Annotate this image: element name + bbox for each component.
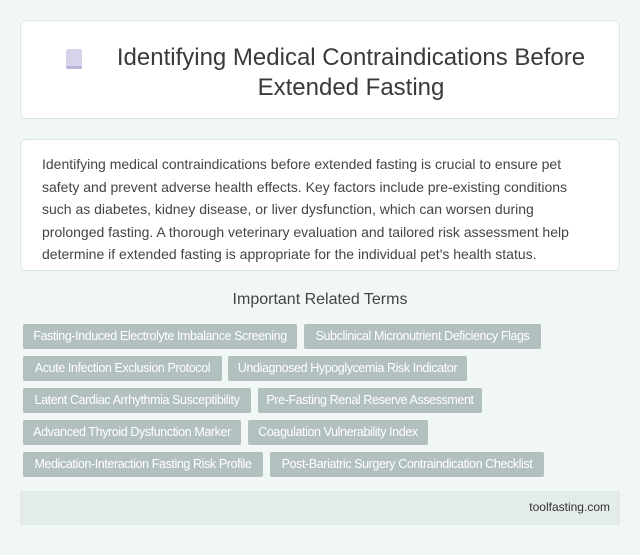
title: Identifying Medical Contraindications Before — [117, 44, 585, 71]
tags: Latent Cardiac Arrhythmia Susceptibility — [35, 393, 239, 407]
tags: Medication-Interaction Fasting Risk Profile — [35, 457, 251, 471]
description text: Identifying medical contraindications before extended fasting is crucial to ensure pet safety and prevent adverse health effects. Key factors include pre-existing conditions such as diabetes, kidney disease, or liver dysfunction, which can worsen during prolonged fasting. A thorough veterinary evaluation and tailored risk assessment help determine if extended fasting is appropriate for the individual pet's health status. — [42, 156, 569, 262]
icon: document — [66, 49, 82, 69]
header card — [20, 20, 620, 119]
tags: Post-Bariatric Surgery Contraindication Checklist — [282, 457, 532, 471]
description card — [20, 139, 620, 271]
tags: Acute Infection Exclusion Protocol — [35, 361, 210, 375]
title: Extended Fasting — [258, 74, 444, 101]
title — [117, 44, 585, 101]
tags: Coagulation Vulnerability Index — [258, 425, 418, 439]
footer — [20, 491, 620, 525]
tags: Pre-Fasting Renal Reserve Assessment — [266, 393, 474, 407]
tags: Fasting-Induced Electrolyte Imbalance Screening — [33, 329, 287, 343]
tags: Undiagnosed Hypoglycemia Risk Indicator — [238, 361, 457, 375]
tags: Subclinical Micronutrient Deficiency Flags — [316, 329, 529, 343]
tags: Advanced Thyroid Dysfunction Marker — [33, 425, 231, 439]
section heading: Important Related Terms — [233, 291, 407, 308]
footer text: toolfasting.com — [529, 500, 610, 514]
